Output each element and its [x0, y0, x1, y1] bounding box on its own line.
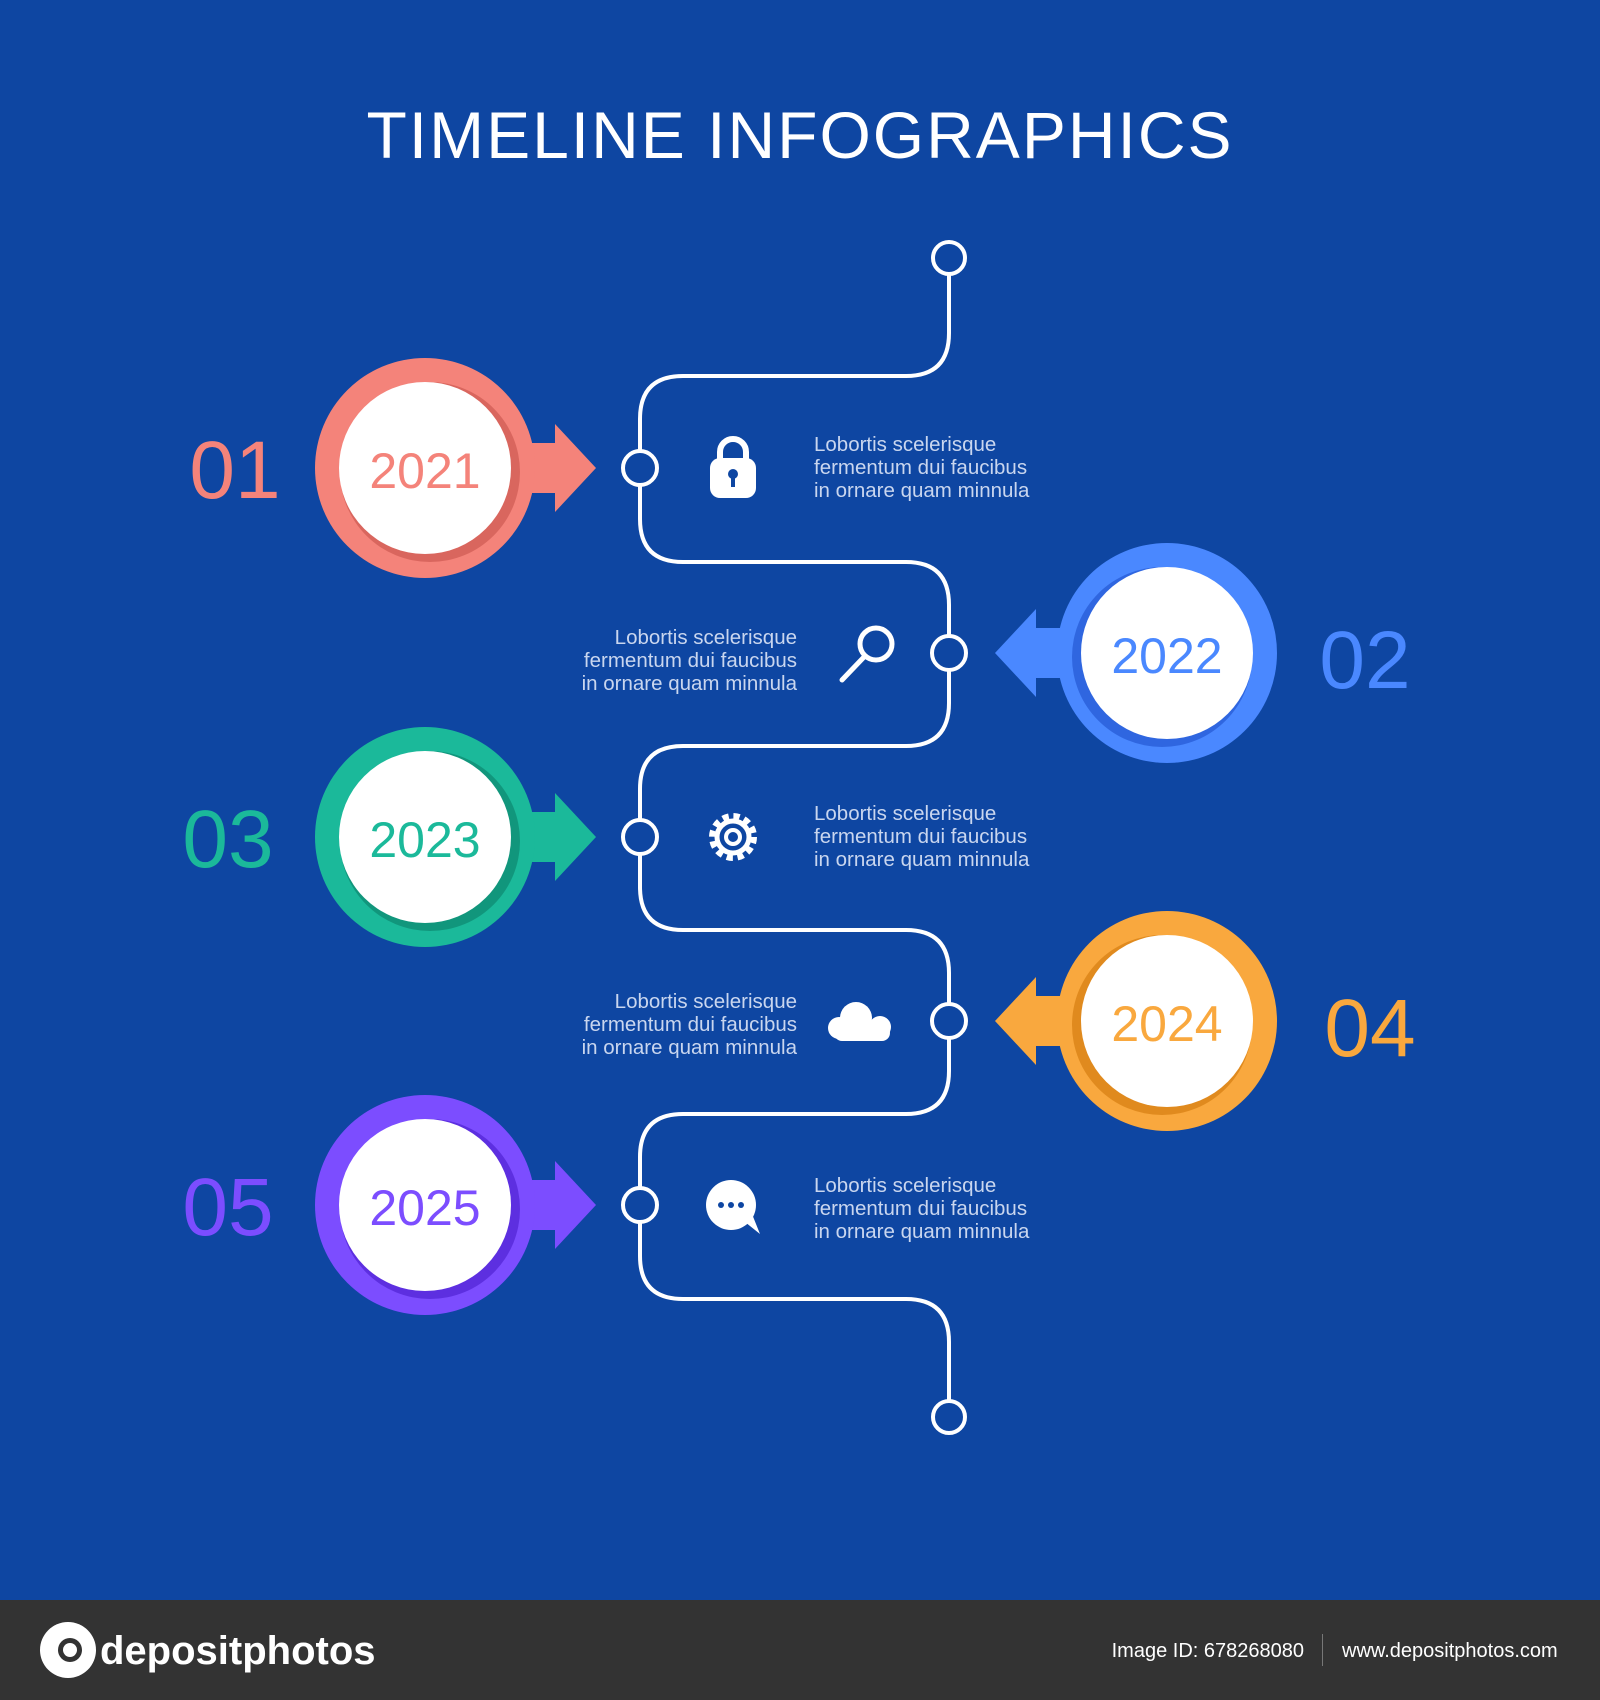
- step 05: 05: [182, 1162, 274, 1253]
- text block 3: in ornare quam minnula: [814, 848, 1030, 871]
- text block 4: in ornare quam minnula: [582, 1036, 798, 1059]
- footer: [0, 1600, 1600, 1700]
- step 02: 2022: [1111, 628, 1223, 684]
- step 02: [995, 543, 1411, 763]
- step 01: 01: [189, 425, 281, 516]
- text block 2: Lobortis scelerisque: [615, 626, 797, 649]
- text block 1: Lobortis scelerisque: [814, 433, 996, 456]
- text block 2: in ornare quam minnula: [582, 672, 798, 695]
- text block 5: fermentum dui faucibus: [814, 1197, 1027, 1220]
- icon: chat bubble: [706, 1180, 760, 1234]
- step 04: 04: [1324, 983, 1416, 1074]
- step 01: [189, 358, 596, 578]
- step 04: 2024: [1111, 996, 1223, 1052]
- step 01: 2021: [369, 443, 481, 499]
- text block 3: Lobortis scelerisque: [814, 802, 996, 825]
- text block 4: [582, 990, 798, 1059]
- title: TIMELINE INFOGRAPHICS: [366, 98, 1234, 172]
- step 03: 2023: [369, 812, 481, 868]
- icon: gear: [713, 817, 753, 857]
- text block 5: in ornare quam minnula: [814, 1220, 1030, 1243]
- text block 5: Lobortis scelerisque: [814, 1174, 996, 1197]
- text block 1: [814, 433, 1030, 502]
- text block 2: fermentum dui faucibus: [584, 649, 797, 672]
- text block 3: [814, 802, 1030, 871]
- step 02: 02: [1319, 615, 1411, 706]
- text block 1: fermentum dui faucibus: [814, 456, 1027, 479]
- text block 4: Lobortis scelerisque: [615, 990, 797, 1013]
- footer: Image ID: 678268080: [1112, 1640, 1304, 1662]
- text block 2: [582, 626, 798, 695]
- step 03: 03: [182, 794, 274, 885]
- step 03: [182, 727, 596, 947]
- footer: depositphotos: [100, 1629, 376, 1673]
- step 05: 2025: [369, 1180, 481, 1236]
- timeline path: [623, 242, 966, 1433]
- step 04: [995, 911, 1416, 1131]
- text block 3: fermentum dui faucibus: [814, 825, 1027, 848]
- icon: cloud: [828, 1002, 891, 1041]
- step 05: [182, 1095, 596, 1315]
- text block 5: [814, 1174, 1030, 1243]
- text block 4: fermentum dui faucibus: [584, 1013, 797, 1036]
- icon: lock: [710, 439, 756, 498]
- icon: magnifier: [842, 628, 892, 680]
- footer: www.depositphotos.com: [1341, 1640, 1558, 1662]
- text block 1: in ornare quam minnula: [814, 479, 1030, 502]
